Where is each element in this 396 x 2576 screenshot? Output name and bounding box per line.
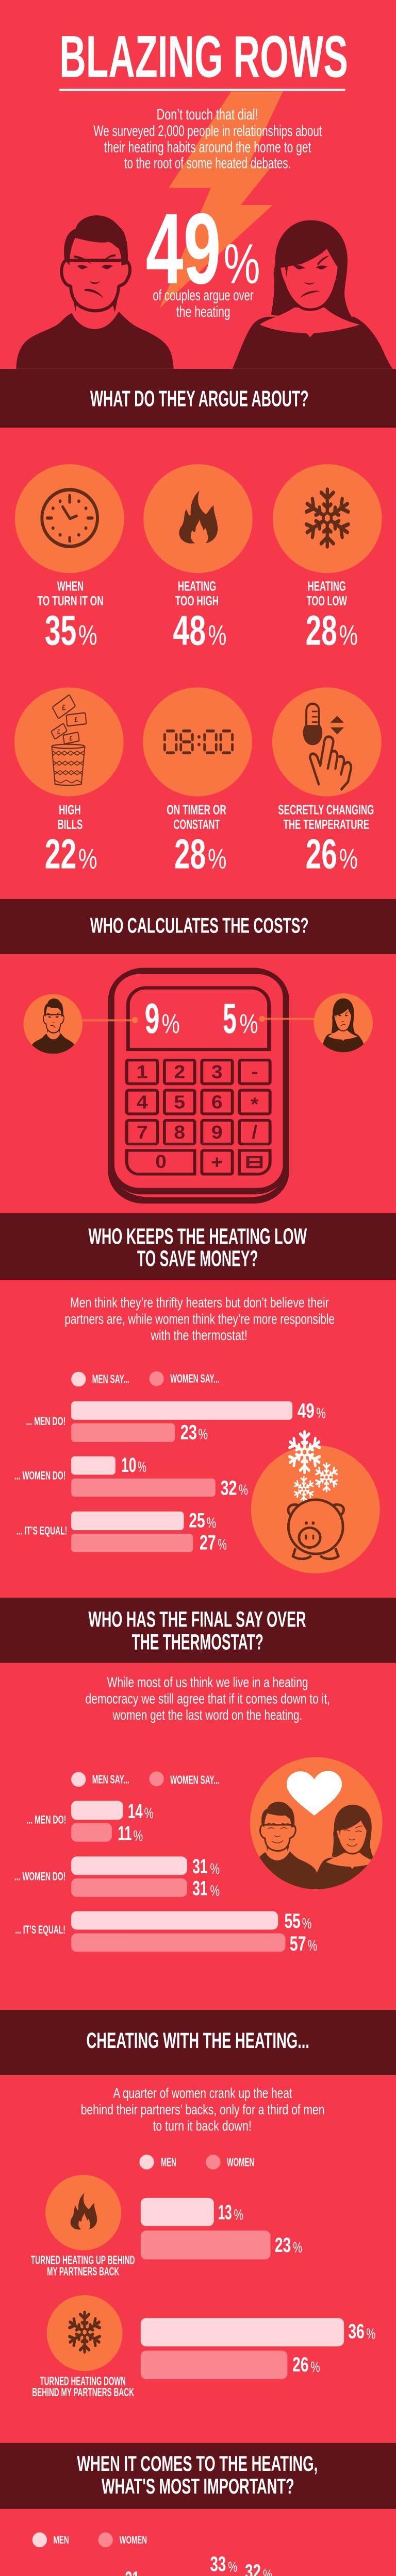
calculator key labels: -	[251, 1061, 258, 1082]
row: turned heating up: %	[234, 2207, 243, 2223]
topic: high bills: HIGH	[59, 803, 81, 818]
topic: heating too high: HEATING	[178, 579, 216, 594]
bar chart: final say: 31	[192, 1876, 208, 1900]
calculator key labels: 5	[174, 1092, 185, 1112]
equals key symbol	[246, 1156, 262, 1168]
bar chart: save money: %	[198, 1427, 208, 1443]
topic: high bills: £	[57, 728, 60, 736]
topic: high bills: £	[62, 703, 66, 713]
49 percent stat: the heating	[176, 303, 230, 320]
bar chart: save money: ... MEN DO!	[26, 1415, 65, 1428]
icon: snowflake	[304, 489, 351, 547]
topic: when to turn it on: %	[78, 619, 97, 651]
value labels: 33	[210, 2552, 226, 2576]
legend: WOMEN	[227, 2156, 254, 2169]
legend	[32, 2532, 147, 2547]
topic: secretly changing the temperature: THE TEMPERATURE	[284, 817, 369, 832]
chart labels and legend	[32, 2532, 272, 2576]
panel: calculator	[24, 968, 373, 1204]
topic: on timer or constant: %	[208, 843, 226, 875]
icon: snowflake	[68, 2312, 101, 2352]
bar chart: final say: 55	[285, 1909, 301, 1933]
paragraph: women get the last word on the heating.	[112, 1707, 302, 1723]
icon: clock	[42, 489, 97, 547]
row: turned heating up: 23	[275, 2233, 291, 2257]
topic: secretly changing the temperature: %	[339, 843, 358, 875]
legend: WOMEN SAY...	[170, 1773, 220, 1786]
women percent: %	[239, 1008, 258, 1039]
banner: who keeps the heating low	[0, 1213, 396, 1280]
angry man	[16, 215, 174, 369]
legend: WOMEN	[120, 2534, 147, 2546]
legend: MEN SAY...	[92, 1372, 129, 1386]
panel: save money	[14, 1295, 380, 1573]
icon: money in bin	[51, 694, 86, 785]
row: turned heating up	[31, 2175, 302, 2278]
calculator key labels: +	[211, 1151, 223, 1172]
icon: thermostat and hand	[303, 704, 351, 789]
icon: digital timer	[164, 731, 233, 753]
bar chart: final say: %	[144, 1805, 154, 1822]
topic: on timer or constant	[143, 687, 252, 878]
row: turned heating down: BEHIND MY PARTNERS BACK	[32, 2385, 134, 2399]
bar chart: final say: 14	[128, 1799, 143, 1823]
bar chart: final say: %	[210, 1883, 220, 1899]
bar chart: final say	[14, 1799, 317, 1955]
bar chart: save money: 10	[121, 1453, 136, 1477]
bar chart: save money: ... WOMEN DO!	[14, 1469, 65, 1482]
bar chart: save money: 23	[180, 1420, 197, 1444]
topic: high bills: £	[70, 735, 73, 742]
bar chart: save money	[14, 1399, 326, 1554]
legend	[71, 1771, 220, 1787]
bar chart: save money: %	[316, 1405, 326, 1421]
row: turned heating down: %	[366, 2326, 375, 2342]
bar chart: save money: 27	[200, 1531, 216, 1554]
legend	[139, 2155, 254, 2170]
icon: piggy bank with snowflakes	[251, 1432, 380, 1573]
calculator key labels: /	[252, 1122, 258, 1142]
topic: on timer or constant: 28	[174, 831, 206, 878]
panel: argument topics	[14, 464, 382, 878]
paragraph: with the thermostat!	[151, 1327, 248, 1343]
legend: MEN SAY...	[92, 1773, 129, 1786]
legend	[71, 1371, 220, 1386]
49 percent stat: of couples argue over	[153, 287, 254, 304]
topic: heating too low: 28	[306, 607, 337, 654]
row: turned heating down: TURNED HEATING DOWN	[40, 2375, 126, 2387]
topic: high bills	[14, 687, 124, 878]
legend: MEN	[53, 2534, 69, 2546]
banner: cheating with the heating	[0, 2010, 396, 2075]
row: turned heating up: MY PARTNERS BACK	[47, 2265, 119, 2278]
calculator key labels: *	[251, 1094, 259, 1114]
topic: on timer or constant: ON TIMER OR	[167, 803, 226, 818]
legend: MEN	[161, 2156, 176, 2169]
women percent: 5	[223, 995, 237, 1042]
paragraph	[86, 1674, 330, 1723]
49 percent stat: %	[223, 232, 260, 295]
bar chart: save money: 32	[221, 1476, 237, 1499]
topic: secretly changing the temperature: 26	[306, 831, 337, 878]
paragraph	[81, 2085, 324, 2133]
angry woman	[233, 220, 393, 369]
hero panel	[16, 23, 393, 369]
topic: heating too low	[273, 464, 382, 654]
bar chart: final say: 57	[290, 1932, 306, 1955]
topic: high bills: %	[78, 843, 97, 875]
calculator key labels: 4	[137, 1092, 148, 1112]
calculator key labels: 6	[211, 1092, 223, 1112]
calculator key labels: 7	[137, 1122, 148, 1142]
topic: when to turn it on: WHEN	[57, 579, 84, 594]
bar chart: final say: %	[134, 1828, 143, 1844]
bar chart: save money: %	[138, 1459, 146, 1476]
bar chart: save money: ... IT’S EQUAL!	[16, 1524, 67, 1537]
calculator key labels	[137, 1061, 259, 1172]
topic: heating too high: TOO HIGH	[175, 594, 219, 608]
icon: flame	[71, 2193, 97, 2230]
panel: cheating	[31, 2085, 375, 2399]
icon: flame	[179, 490, 218, 544]
man portrait	[24, 994, 82, 1054]
paragraph	[64, 1295, 335, 1343]
calculator key labels: 1	[137, 1061, 148, 1082]
calculator keys	[127, 1060, 270, 1174]
banner: who keeps the heating low: TO SAVE MONEY?	[137, 1246, 258, 1271]
topic: high bills: BILLS	[58, 817, 82, 832]
calculator key labels: 9	[211, 1122, 223, 1142]
topic: on timer or constant: CONSTANT	[173, 817, 220, 832]
banner: what do they argue about	[0, 369, 396, 428]
banner: who has the final say	[0, 1598, 396, 1663]
row: turned heating down: %	[310, 2359, 320, 2376]
calculator key labels: 2	[174, 1061, 185, 1082]
topic: heating too high: %	[208, 619, 226, 651]
men percent: %	[161, 1008, 180, 1039]
topic: heating too high	[143, 464, 253, 654]
row: turned heating down: 36	[348, 2319, 365, 2343]
bar chart: final say: ... WOMEN DO!	[14, 1870, 65, 1883]
intro text: Don’t touch that dial!	[157, 107, 258, 123]
row: turned heating up: %	[293, 2240, 302, 2256]
legend: WOMEN SAY...	[170, 1372, 220, 1385]
paragraph: While most of us think we live in a heating	[107, 1674, 308, 1690]
bar chart: final say: 31	[192, 1854, 208, 1878]
bar chart: final say: %	[210, 1861, 220, 1877]
row: turned heating up: TURNED HEATING UP BEHIND	[31, 2253, 135, 2267]
intro text	[93, 107, 322, 172]
row: turned heating down	[32, 2295, 375, 2399]
calculator key labels: 0	[155, 1151, 167, 1172]
49 percent stat: 49	[146, 193, 221, 305]
men percent: 9	[145, 995, 160, 1042]
lightning bolt	[160, 92, 283, 308]
calculator body	[108, 968, 289, 1204]
topic: when to turn it on: TO TURN IT ON	[37, 594, 104, 608]
value labels: %	[228, 2560, 237, 2575]
topic: high bills: £	[74, 716, 78, 724]
value labels	[40, 2552, 272, 2576]
row: turned heating down: 26	[292, 2353, 309, 2376]
bar chart: final say: %	[302, 1916, 311, 1932]
bar chart: final say: 11	[118, 1821, 132, 1845]
topic: when to turn it on: 35	[45, 607, 76, 654]
panel: final say	[14, 1674, 395, 1955]
calculator key labels: 8	[174, 1122, 185, 1142]
banner: who calculates the costs	[0, 899, 396, 954]
title rule	[59, 89, 345, 91]
intro text: their heating habits around the home to get	[104, 139, 311, 156]
banner: what's most important	[0, 2443, 396, 2509]
bar chart: final say: %	[308, 1938, 317, 1954]
bar chart: save money: 49	[298, 1399, 315, 1422]
icon: happy couple with heart	[250, 1757, 383, 1889]
connector: woman	[259, 1016, 314, 1022]
topic: heating too low: HEATING	[308, 579, 346, 594]
topic: high bills: 22	[45, 831, 76, 878]
bar chart: save money: %	[218, 1537, 227, 1553]
calculator key labels: 3	[211, 1061, 223, 1082]
row: turned heating up: 13	[218, 2200, 232, 2224]
bar chart: save money: 25	[189, 1509, 205, 1532]
topic: heating too low: TOO LOW	[307, 594, 347, 608]
topic: heating too low: %	[339, 619, 358, 651]
bar chart: save money: %	[239, 1482, 248, 1498]
bar chart: save money: %	[207, 1515, 216, 1531]
connector: man	[83, 1017, 138, 1023]
topic: heating too high: 48	[173, 607, 206, 654]
topic: secretly changing the temperature	[272, 687, 382, 878]
paragraph: to turn it back down!	[153, 2118, 252, 2133]
paragraph: A quarter of women crank up the heat	[113, 2085, 292, 2101]
woman portrait	[314, 993, 373, 1053]
intro text: to the root of some heated debates.	[124, 155, 291, 172]
bar chart: final say: ... IT’S EQUAL!	[15, 1923, 65, 1936]
bar chart: final say: ... MEN DO!	[26, 1814, 66, 1826]
topic: when to turn it on	[15, 464, 124, 654]
banner: who has the final say: THE THERMOSTAT?	[132, 1630, 263, 1655]
